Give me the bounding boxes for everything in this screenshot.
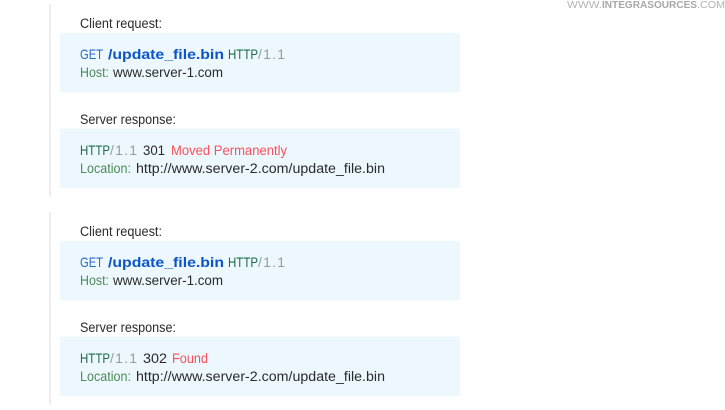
server response heading: Server response: [80,320,176,335]
client request box: /1.1 [258,46,285,62]
client request box: /1.1 [258,254,285,270]
server response box: Location: [80,369,131,384]
side bar [49,4,51,197]
server response box: 301 [143,143,165,158]
server response box [60,336,460,396]
client request box [60,33,460,92]
client request box: www.server-1.com [112,273,223,288]
server response box: /1.1 [110,350,137,366]
watermark: WWW. [567,0,602,11]
client request box: Host: [80,273,109,288]
side bar [49,212,51,405]
client request box: /update_file.bin [108,46,224,62]
server response box: http://www.server-2.com/update_file.bin [136,369,385,384]
watermark: INTEGRASOURCES [602,0,697,11]
server response box: HTTP [80,142,110,158]
server response box: Moved Permanently [171,143,287,158]
server response box: Location: [80,161,131,176]
client request box [60,241,460,300]
server response box: 302 [143,351,167,366]
client request box: /update_file.bin [108,254,224,270]
server response box: HTTP [80,350,110,366]
watermark [567,0,725,11]
server response box: /1.1 [110,142,137,158]
client request box: Host: [80,65,109,80]
panel: 301 redirect example [49,4,460,197]
panel: 302 redirect example [49,212,460,405]
server response heading: Server response: [80,112,176,127]
server response box: http://www.server-2.com/update_file.bin [136,161,385,176]
server response box: Found [172,351,208,366]
client request box: GET [80,46,103,62]
client request heading: Client request: [80,224,162,239]
client request box: HTTP [228,46,258,62]
client request box: GET [80,254,103,270]
watermark: .COM [697,0,725,11]
client request heading: Client request: [80,16,162,31]
client request box: HTTP [228,254,258,270]
client request box: www.server-1.com [112,65,223,80]
server response box [60,128,460,188]
